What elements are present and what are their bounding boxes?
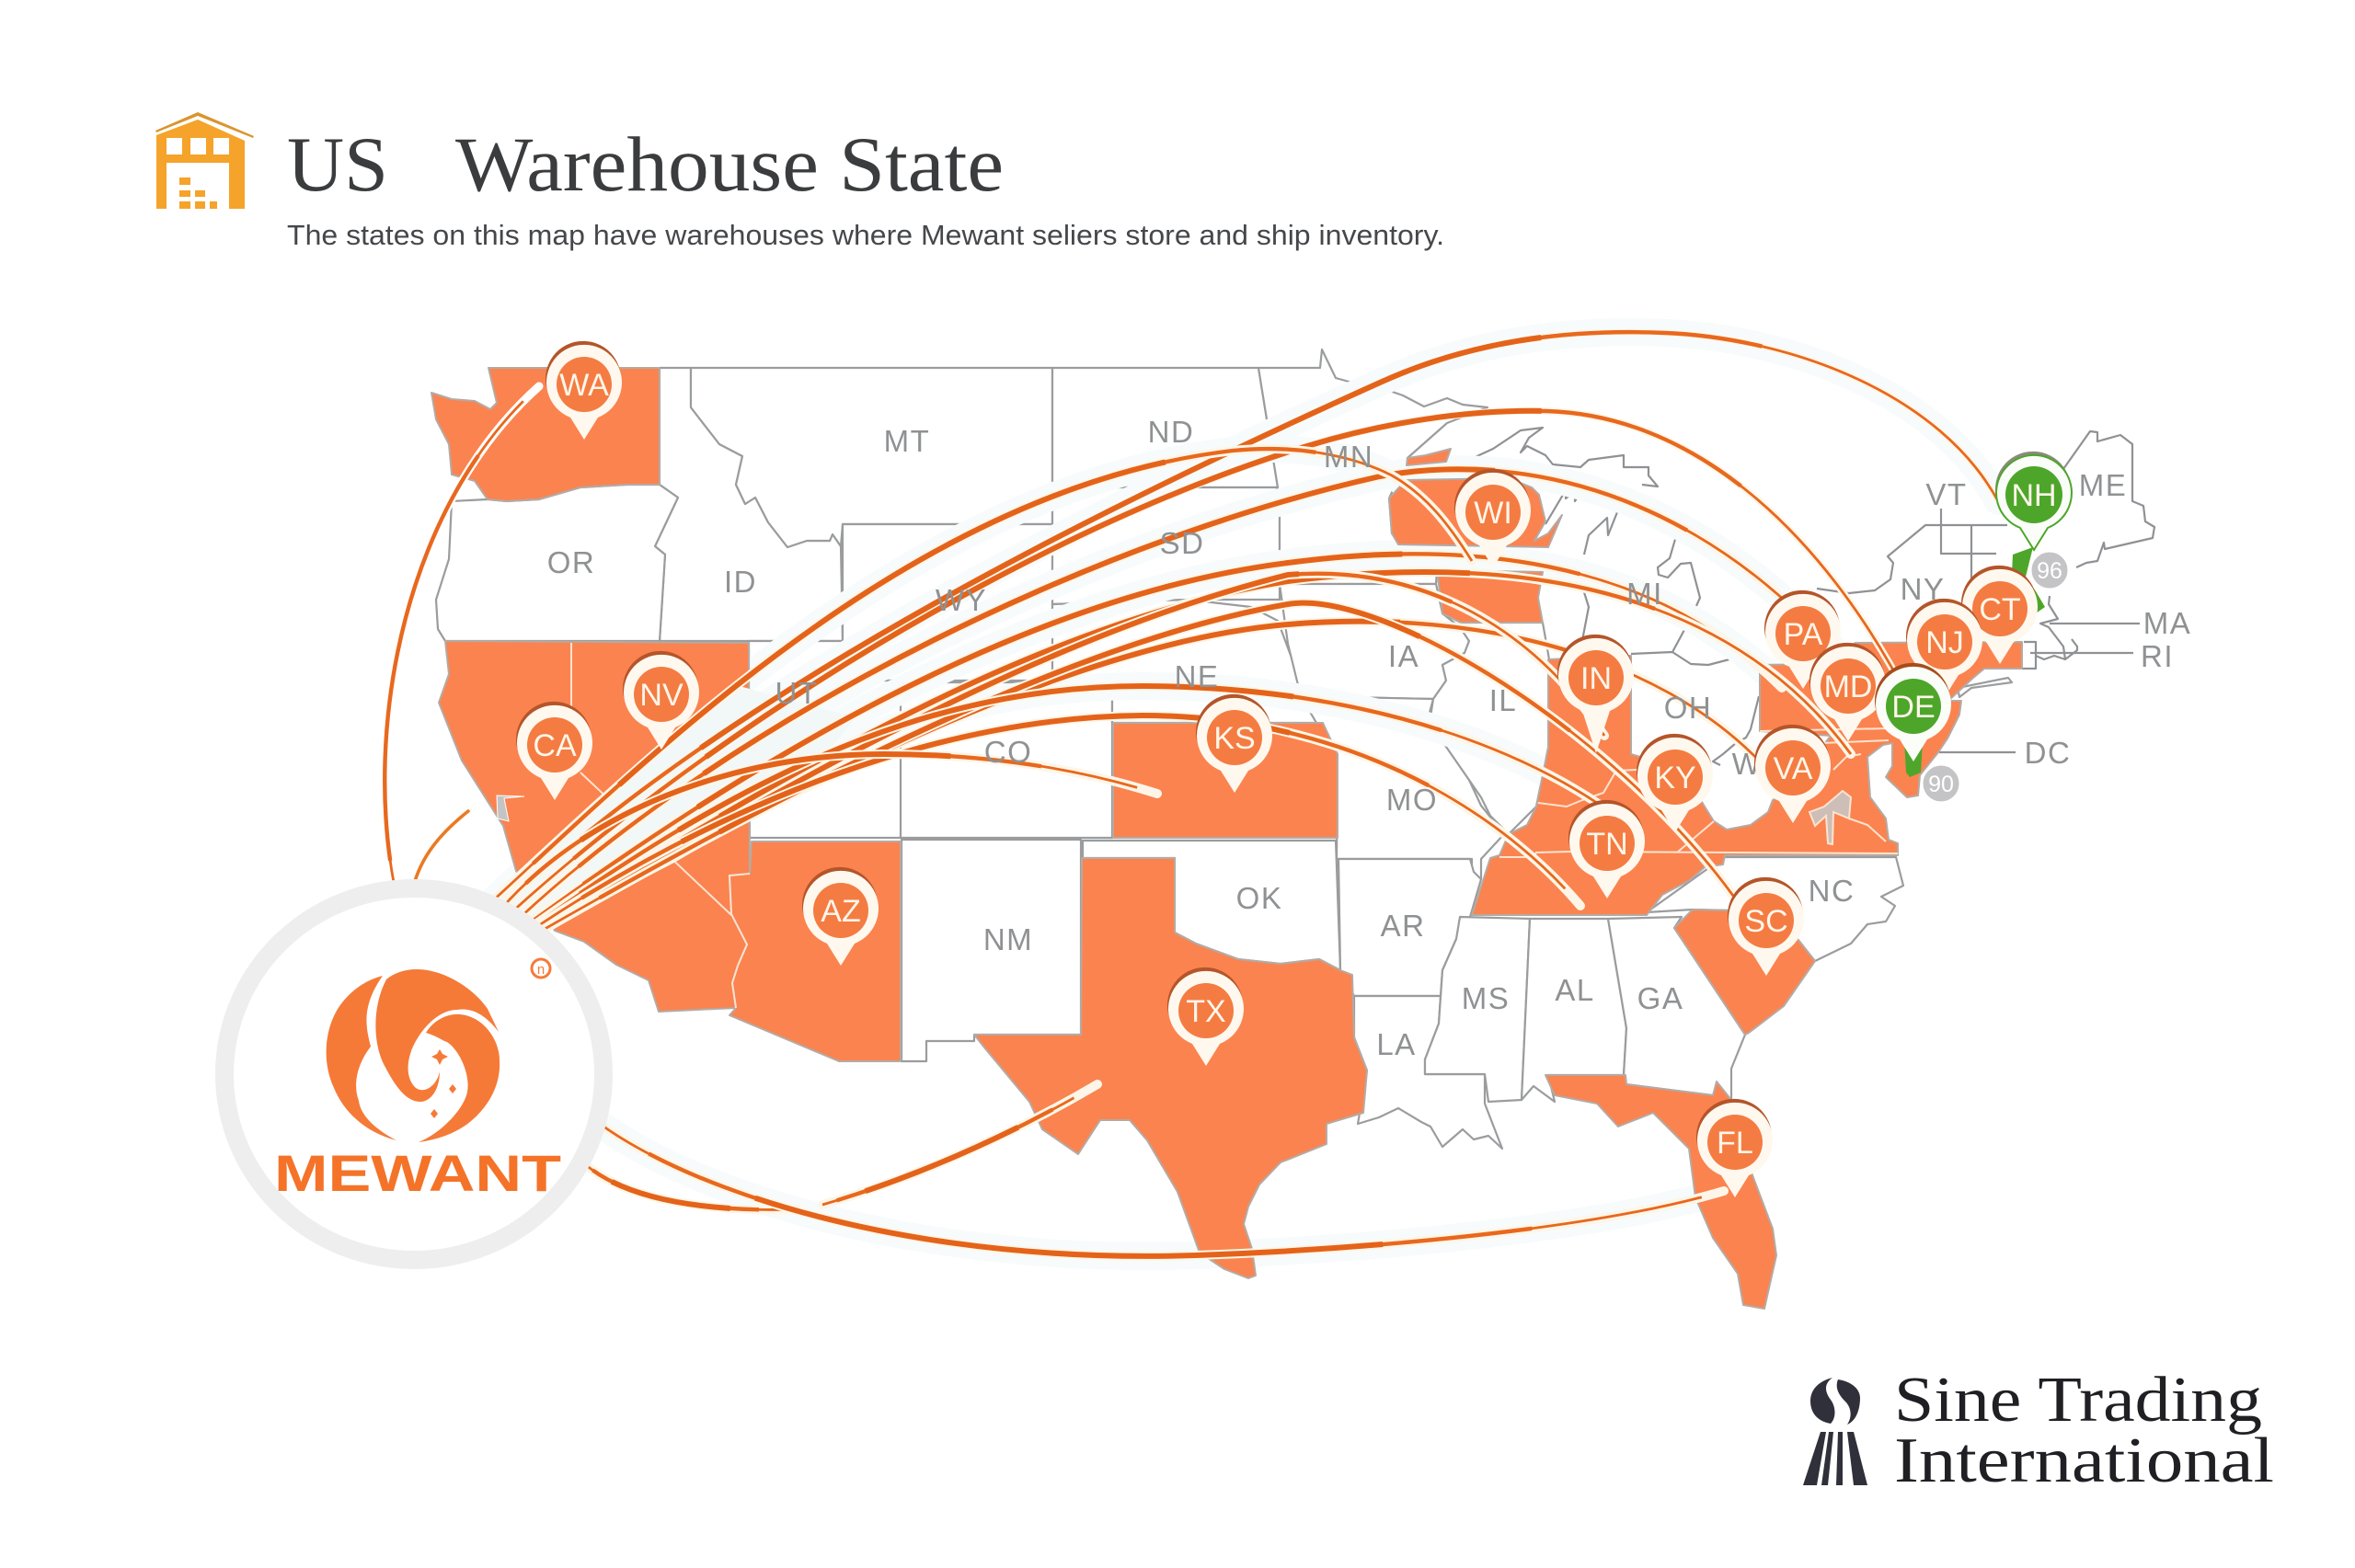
pin: FL: FL <box>1717 1126 1753 1161</box>
state labels: GA <box>1637 981 1683 1015</box>
state labels: SD <box>1160 526 1204 560</box>
state labels: IA <box>1388 639 1419 673</box>
state labels: IL <box>1489 683 1517 717</box>
pin: MD <box>1809 643 1886 741</box>
pin: DE <box>1875 663 1951 761</box>
route to Texas <box>584 1084 1097 1209</box>
pin: IN: IN <box>1580 661 1612 696</box>
pin: NH <box>1995 452 2072 550</box>
routes <box>385 332 1998 1256</box>
route to Delaware <box>511 411 1913 913</box>
brand: International: International <box>1894 1425 2274 1496</box>
state labels: NE <box>1175 659 1219 693</box>
pin: MD: MD <box>1824 670 1872 704</box>
pin: NH: NH <box>2011 478 2057 513</box>
pin: KY <box>1637 734 1713 832</box>
state labels: W <box>1732 747 1762 781</box>
brand: Sine Trading logo mark <box>1803 1378 1867 1485</box>
state labels: ME <box>2079 468 2127 502</box>
state labels: UT <box>775 676 819 710</box>
pin: AZ: AZ <box>821 894 861 929</box>
state labels: WY <box>936 583 987 617</box>
route to Virginia <box>540 622 1762 932</box>
pin: NV <box>623 651 699 750</box>
route to Florida <box>600 1124 1724 1256</box>
state labels: MT <box>884 424 930 458</box>
state labels: RI <box>2141 639 2174 673</box>
state: AZ <box>729 841 901 1061</box>
title: second part: Warehouse State <box>455 121 1004 208</box>
state labels: NY <box>1901 572 1945 606</box>
state: DE green <box>1904 740 1923 777</box>
state: CA and NV <box>439 641 750 1012</box>
route to Washington <box>385 386 539 887</box>
pin: CA: CA <box>533 728 577 763</box>
logo registered mark <box>532 959 550 978</box>
badge: 96: 96 <box>2037 558 2062 584</box>
pin: VA: VA <box>1774 751 1813 786</box>
glow behind routes <box>490 332 1998 1256</box>
pin: SC: SC <box>1744 904 1788 939</box>
pin: IN <box>1557 635 1634 753</box>
interior borders <box>571 643 1898 1008</box>
icon: warehouse <box>155 112 254 209</box>
state labels: OR <box>547 545 595 579</box>
pin: KS: KS <box>1213 721 1256 756</box>
state: NH green <box>2012 547 2045 613</box>
pin: WI <box>1454 469 1531 567</box>
logo circle <box>224 888 603 1260</box>
pin: WI: WI <box>1474 496 1512 531</box>
state: SC <box>1674 910 1815 1035</box>
state labels: MS <box>1462 981 1510 1015</box>
pin: SC <box>1728 877 1804 976</box>
route to Indiana <box>535 574 1604 929</box>
state labels: NC <box>1809 874 1855 908</box>
state labels: OK <box>1236 881 1282 915</box>
state labels: MA <box>2143 606 2191 640</box>
title: US <box>287 121 388 208</box>
state labels: ID <box>724 565 757 599</box>
map: white states <box>436 349 2154 1149</box>
subtitle: The states on this map have warehouses where Mewant seliers store and ship inventory. <box>287 219 1444 251</box>
logo mark <box>327 969 500 1142</box>
leader lines <box>1939 624 2140 752</box>
pin: CT: CT <box>1979 592 2021 627</box>
state labels: MI <box>1626 577 1663 611</box>
state: WI <box>1389 449 1562 623</box>
state: WA <box>431 368 660 501</box>
state labels: DC <box>2025 736 2071 770</box>
route to Tennessee north <box>532 686 1619 927</box>
pin: TX: TX <box>1186 994 1226 1029</box>
badge: 96 <box>2030 551 2069 589</box>
pin: PA: PA <box>1784 617 1823 652</box>
brand: Sine Trading: Sine Trading <box>1894 1365 2262 1436</box>
state: TX <box>974 858 1367 1278</box>
state labels: VT <box>1925 477 1968 511</box>
state labels: MO <box>1386 783 1438 817</box>
pin: DE: DE <box>1891 690 1936 725</box>
pin: CA <box>516 702 592 800</box>
pin: TN <box>1568 800 1645 898</box>
pin: CT <box>1961 566 2038 664</box>
DC area gray patch <box>1809 791 1851 844</box>
state: FL <box>1545 1075 1776 1309</box>
route to Maryland south <box>532 572 1851 927</box>
logo registered mark: n <box>537 962 545 978</box>
route to Kentucky and South Carolina <box>540 603 1733 932</box>
state labels <box>547 415 2191 1061</box>
route to New Hampshire <box>501 332 1998 909</box>
route to Tennessee south <box>534 715 1580 929</box>
route to Pennsylvania <box>527 554 1782 924</box>
state labels: AL <box>1555 973 1595 1007</box>
pin: NJ: NJ <box>1925 625 1964 660</box>
state labels: MN <box>1324 440 1373 474</box>
state labels: OH <box>1664 691 1712 725</box>
pin: TN: TN <box>1586 827 1628 862</box>
state: IN TN KY VA PA MD NJ CT <box>1472 642 2022 915</box>
pin: WA: WA <box>559 368 609 403</box>
logo wordmark: MEWANT <box>274 1144 561 1202</box>
state: KS <box>1113 723 1338 838</box>
badge: 90 <box>1922 764 1960 803</box>
SF bay <box>497 795 524 821</box>
state labels: AR <box>1381 909 1425 943</box>
route to Kansas <box>501 754 1157 909</box>
pin: VA <box>1754 725 1831 823</box>
state labels: ND <box>1148 415 1194 449</box>
route to Maryland <box>520 469 1881 918</box>
badge: 90: 90 <box>1928 772 1954 797</box>
pin: NV: NV <box>639 678 684 713</box>
pin: KS <box>1196 694 1272 793</box>
state labels: CO <box>984 735 1032 769</box>
state labels: LA <box>1376 1027 1417 1061</box>
route to Wisconsin <box>490 449 1472 903</box>
pin: FL <box>1696 1099 1773 1197</box>
pin: KY: KY <box>1654 761 1696 795</box>
state labels: NM <box>983 922 1033 956</box>
pin: TX <box>1167 967 1244 1066</box>
pin: PA <box>1764 590 1841 689</box>
pin: AZ <box>802 867 879 966</box>
route fan band <box>490 685 856 932</box>
map: warehouse states <box>431 368 2045 1309</box>
pin: WA <box>546 341 622 440</box>
pin: NJ <box>1906 599 1982 697</box>
route to California <box>413 811 468 887</box>
